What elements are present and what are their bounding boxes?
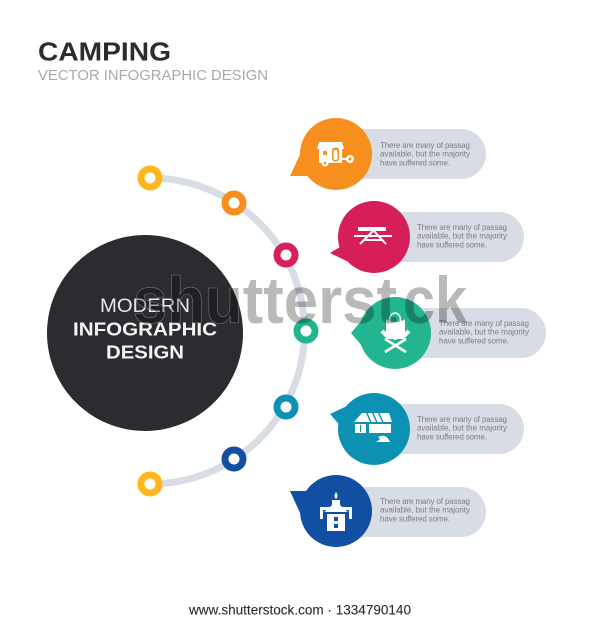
text block: available, but the majority (417, 424, 507, 432)
watermark: shutterst (133, 263, 397, 337)
text block: There are many of passag (417, 415, 507, 424)
text block: There are many of passag (439, 319, 529, 328)
text block: have suffered some. (439, 336, 509, 346)
step 4: cabin (330, 393, 524, 465)
text block: have suffered some. (417, 432, 487, 442)
watermark: ck (403, 263, 467, 337)
central circle: INFOGRAPHIC (73, 318, 217, 340)
text block (380, 141, 470, 168)
text block: have suffered some. (417, 240, 487, 250)
text block: There are many of passag (380, 497, 470, 506)
icon: camp chair (382, 313, 409, 352)
watermark: shutterst (133, 263, 397, 337)
text block (380, 497, 470, 524)
text block (417, 223, 507, 250)
step 2: picnic table (330, 201, 524, 273)
text block: There are many of passag (417, 223, 507, 232)
icon: cabin (354, 413, 392, 442)
text block: available, but the majority (417, 232, 507, 240)
text block: There are many of passag (380, 141, 470, 150)
subtitle: VECTOR INFOGRAPHIC DESIGN (38, 68, 268, 84)
icon: caravan (317, 142, 354, 166)
step 3: camp chair (351, 297, 546, 369)
central circle (47, 235, 243, 431)
text block (417, 415, 507, 442)
title: CAMPING (38, 38, 171, 66)
text block (439, 319, 529, 346)
text block: have suffered some. (380, 514, 450, 524)
footer url: www.shutterstock.com · 1334790140 (188, 602, 411, 618)
central circle: MODERN (100, 296, 190, 317)
watermark (134, 274, 467, 324)
text block: available, but the majority (380, 506, 470, 514)
step 5: lantern (290, 475, 486, 547)
icon: picnic table (354, 229, 392, 244)
step 1: caravan (290, 118, 486, 190)
text block: available, but the majority (439, 328, 529, 336)
icon: lantern (320, 492, 352, 531)
timeline nodes (141, 169, 315, 493)
text block: have suffered some. (380, 158, 450, 168)
timeline arc (150, 178, 304, 484)
text block: available, but the majority (380, 150, 470, 158)
central circle: DESIGN (106, 342, 184, 362)
